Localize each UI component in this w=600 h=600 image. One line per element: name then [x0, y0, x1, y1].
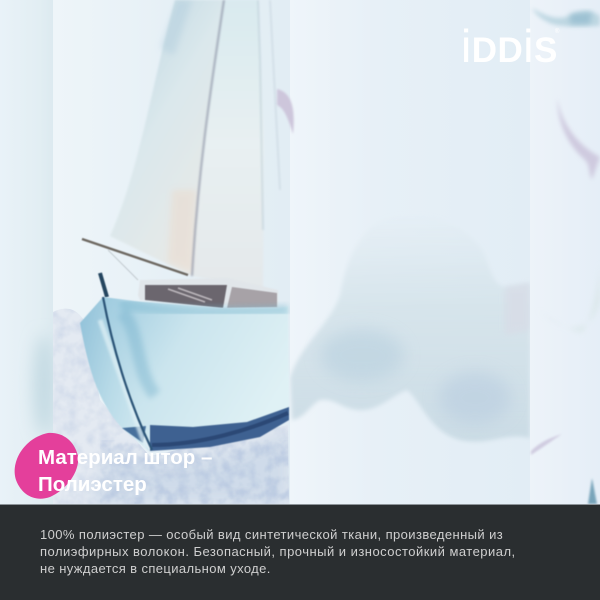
watercolor cloud: [290, 256, 530, 442]
description text: не нуждается в специальном уходе.: [40, 561, 271, 576]
logo: IDDIS: ®: [555, 29, 559, 35]
logo: IDDIS: iDDiS: [461, 20, 558, 72]
hull: [80, 297, 289, 452]
description text: [40, 527, 516, 576]
birds and faint strokes: [277, 8, 600, 504]
heading: [38, 446, 212, 496]
textured wash behind boat: [53, 300, 290, 504]
bottom dark panel: [0, 504, 600, 600]
heading: Полиэстер: [38, 473, 147, 496]
description text: полиэфирных волокон. Безопасный, прочный и износостойкий материал,: [40, 544, 516, 559]
heading: Материал штор –: [38, 446, 212, 469]
description text: 100% полиэстер — особый вид синтетической ткани, произведенный из: [40, 527, 503, 542]
sail: [110, 0, 280, 290]
boom and cabin: [82, 239, 278, 308]
sailboat: [53, 0, 290, 504]
